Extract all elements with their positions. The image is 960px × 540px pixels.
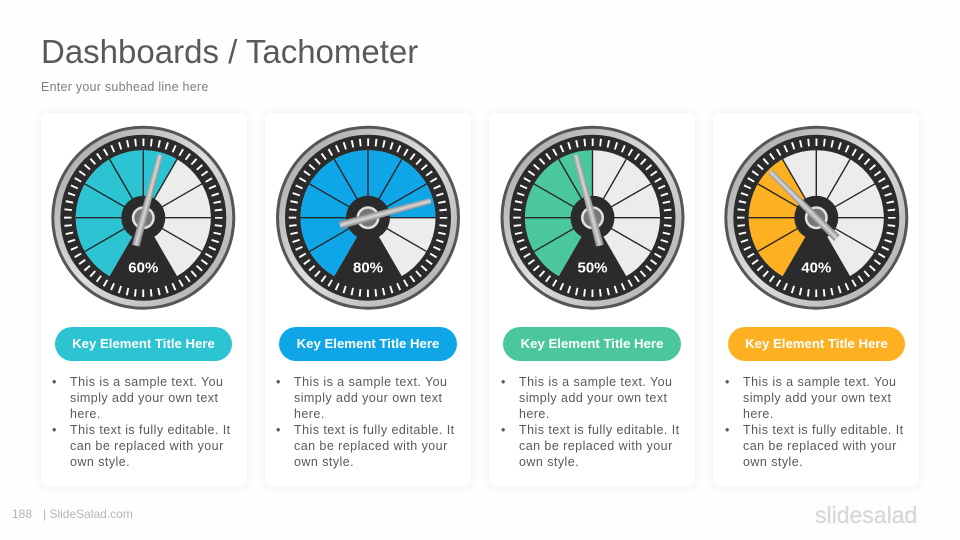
pill title: Key Element Title Here bbox=[297, 336, 439, 351]
subhead: Enter your subhead line here bbox=[41, 80, 209, 94]
bullet text: This text is fully editable. It bbox=[519, 423, 680, 437]
bullet text: own style. bbox=[294, 455, 354, 469]
logo: slidesalad: slidesalad bbox=[815, 502, 917, 528]
tachometer 80% bbox=[276, 126, 460, 310]
bullet text: This text is fully editable. It bbox=[743, 423, 904, 437]
pill title bbox=[55, 327, 232, 361]
panel: gauge 80% bbox=[265, 113, 471, 486]
bullet text: This text is fully editable. It bbox=[70, 423, 231, 437]
tachometer 40% bbox=[724, 126, 908, 310]
bullet text: • bbox=[725, 375, 730, 389]
bullet text: own style. bbox=[70, 455, 130, 469]
bullet text: can be replaced with your bbox=[519, 439, 673, 453]
bullet text: • bbox=[52, 423, 57, 437]
bullet text: • bbox=[276, 375, 281, 389]
bullet text: This is a sample text. You bbox=[743, 375, 896, 389]
bullet text bbox=[276, 375, 455, 469]
bullet text: here. bbox=[70, 407, 101, 421]
bullet text: own style. bbox=[519, 455, 579, 469]
pill title bbox=[279, 327, 457, 361]
bullet text: • bbox=[276, 423, 281, 437]
title: Dashboards / Tachometer bbox=[41, 33, 418, 70]
bullet text: here. bbox=[294, 407, 325, 421]
bullet text: This text is fully editable. It bbox=[294, 423, 455, 437]
pill title bbox=[728, 327, 905, 361]
pill title: Key Element Title Here bbox=[745, 336, 888, 351]
bullet text: simply add your own text bbox=[519, 391, 667, 405]
pill title bbox=[503, 327, 681, 361]
bullet text: simply add your own text bbox=[743, 391, 891, 405]
page number: 188 bbox=[12, 507, 32, 521]
panel: gauge 40% bbox=[713, 113, 919, 486]
tachometer 60% bbox=[51, 126, 236, 310]
bullet text: here. bbox=[519, 407, 550, 421]
bullet text: This is a sample text. You bbox=[519, 375, 672, 389]
bullet text: • bbox=[725, 423, 730, 437]
footer source: | SlideSalad.com bbox=[43, 507, 133, 521]
bullet text: simply add your own text bbox=[70, 391, 218, 405]
tachometer 40%: 40% bbox=[801, 260, 831, 277]
bullet text: can be replaced with your bbox=[294, 439, 448, 453]
tachometer 60%: 60% bbox=[128, 260, 158, 277]
tachometer 50%: 50% bbox=[577, 260, 608, 277]
tachometer 80%: 80% bbox=[353, 260, 383, 277]
panel: gauge 60% bbox=[41, 113, 247, 486]
bullet text: • bbox=[52, 375, 57, 389]
tachometer 50% bbox=[500, 126, 684, 310]
bullet text: • bbox=[501, 423, 506, 437]
bullet text: here. bbox=[743, 407, 774, 421]
pill title: Key Element Title Here bbox=[72, 336, 215, 351]
pill title: Key Element Title Here bbox=[521, 336, 663, 351]
bullet text: • bbox=[501, 375, 506, 389]
bullet text bbox=[725, 375, 904, 469]
panel: gauge 50% bbox=[489, 113, 695, 486]
bullet text: can be replaced with your bbox=[70, 439, 224, 453]
bullet text bbox=[501, 375, 680, 469]
bullet text: This is a sample text. You bbox=[294, 375, 447, 389]
bullet text: own style. bbox=[743, 455, 803, 469]
bullet text bbox=[52, 375, 231, 469]
bullet text: simply add your own text bbox=[294, 391, 442, 405]
bullet text: can be replaced with your bbox=[743, 439, 897, 453]
bullet text: This is a sample text. You bbox=[70, 375, 223, 389]
